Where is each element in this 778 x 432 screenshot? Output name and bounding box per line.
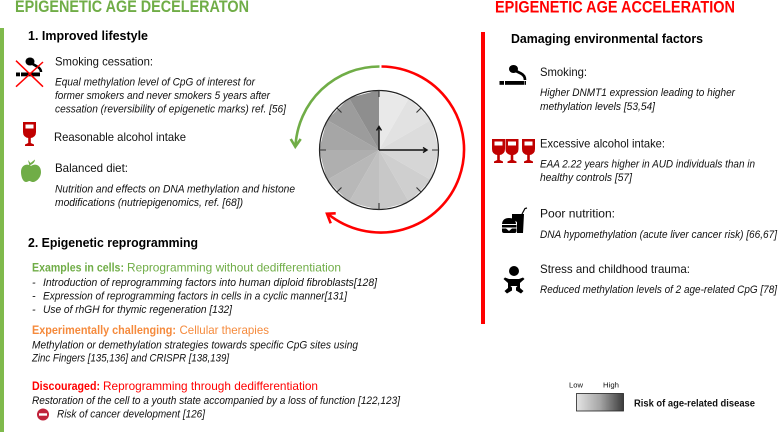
text: reasonable alcohol intake: Reasonable alcohol intake bbox=[54, 130, 186, 144]
text: smoking bbox=[540, 65, 735, 113]
clock bbox=[319, 90, 439, 210]
icon: no smoking bbox=[16, 58, 43, 87]
text: smoking cessation: Equal methylation level of CpG of interest for bbox=[55, 76, 255, 88]
text: smoking cessation: cessation (reversibility of epigenetic marks) ref. [56] bbox=[55, 104, 287, 116]
icon: baby bbox=[504, 266, 524, 294]
text: balanced diet bbox=[55, 161, 295, 209]
heading: improved lifestyle: 1. Improved lifestyle bbox=[28, 29, 148, 43]
text: examples in cells: Examples in cells: bbox=[32, 261, 124, 275]
text: discouraged: Risk of cancer development [126] bbox=[57, 409, 206, 421]
text: experimentally challenging bbox=[31, 323, 358, 365]
text: experimentally challenging: Cellular therapies bbox=[180, 323, 269, 337]
text: examples in cells: Expression of reprogramming factors in cells in a cyclic manner[131] bbox=[43, 291, 348, 303]
text: smoking: methylation levels [53,54] bbox=[540, 101, 656, 113]
text: excessive alcohol: Excessive alcohol intake: bbox=[540, 137, 665, 151]
panel: improved lifestyle bbox=[16, 29, 295, 209]
text: smoking: Higher DNMT1 expression leading to higher bbox=[540, 87, 735, 99]
text: balanced diet: modifications (nutriepigenomics, ref. [68]) bbox=[55, 197, 243, 209]
legend: risk of age-related disease: Low bbox=[569, 381, 584, 390]
arrow: green deceleration bbox=[291, 66, 380, 147]
text: examples in cells: - bbox=[32, 291, 36, 303]
text: stress and childhood trauma bbox=[540, 262, 778, 296]
icon: three wine glasses bbox=[492, 139, 535, 163]
text: experimentally challenging: Zinc Fingers [135,136] and CRISPR [138,139] bbox=[31, 353, 230, 365]
icon: wine glass bbox=[23, 122, 36, 146]
heading: epigenetic reprogramming: 2. Epigenetic reprogramming bbox=[28, 236, 198, 250]
text: examples in cells bbox=[32, 261, 378, 316]
text: smoking: Smoking: bbox=[540, 65, 587, 79]
text: poor nutrition: Poor nutrition: bbox=[540, 207, 615, 221]
legend: risk of age-related disease: High bbox=[603, 381, 619, 390]
legend: risk of age-related disease: Risk of age-related disease bbox=[634, 398, 755, 410]
icon: apple bbox=[21, 160, 41, 182]
red side bar bbox=[481, 32, 485, 324]
text: smoking cessation bbox=[55, 54, 287, 116]
text: discouraged: Reprogramming through dedifferentiation bbox=[103, 379, 318, 393]
text: discouraged bbox=[32, 379, 401, 421]
text: excessive alcohol bbox=[540, 137, 755, 184]
text: discouraged: Discouraged: bbox=[32, 379, 100, 393]
legend: risk of age-related disease bbox=[569, 381, 755, 411]
text: poor nutrition bbox=[540, 207, 778, 241]
text: discouraged: Restoration of the cell to a youth state accompanied by a loss of function [122,123] bbox=[32, 395, 401, 407]
heading: damaging environmental factors: Damaging environmental factors bbox=[511, 32, 703, 46]
panel: damaging environmental factors bbox=[492, 32, 778, 296]
text: experimentally challenging: Methylation or demethylation strategies towards specific CpG sites using bbox=[32, 339, 358, 351]
icon: fast food bbox=[502, 208, 527, 233]
text: excessive alcohol: EAA 2.22 years higher in AUD individuals than in bbox=[540, 159, 755, 171]
text: experimentally challenging: Experimentally challenging: bbox=[32, 323, 176, 337]
text: examples in cells: Use of rhGH for thymic regeneration [132] bbox=[43, 304, 233, 316]
text: excessive alcohol: healthy controls [57] bbox=[540, 172, 633, 184]
arrow: red acceleration bbox=[327, 66, 464, 232]
text: examples in cells: Reprogramming without dedifferentiation bbox=[127, 261, 341, 275]
text: balanced diet: Nutrition and effects on DNA methylation and histone bbox=[55, 184, 295, 196]
clock hands bbox=[376, 126, 427, 152]
text: stress and childhood trauma: Stress and childhood trauma: bbox=[540, 262, 690, 276]
text: examples in cells: - bbox=[32, 304, 36, 316]
text: smoking cessation: Smoking cessation: bbox=[55, 54, 153, 68]
text: examples in cells: - bbox=[32, 277, 36, 289]
text: balanced diet: Balanced diet: bbox=[55, 161, 128, 175]
green side bar bbox=[0, 28, 4, 432]
panel: epigenetic reprogramming bbox=[28, 236, 401, 421]
text: smoking cessation: former smokers and never smokers 5 years after bbox=[55, 90, 270, 102]
icon: smoking bbox=[500, 65, 526, 85]
text: examples in cells: Introduction of reprogramming factors into human diploid fibroblasts[128] bbox=[43, 277, 378, 289]
icon: no entry bbox=[37, 408, 49, 420]
